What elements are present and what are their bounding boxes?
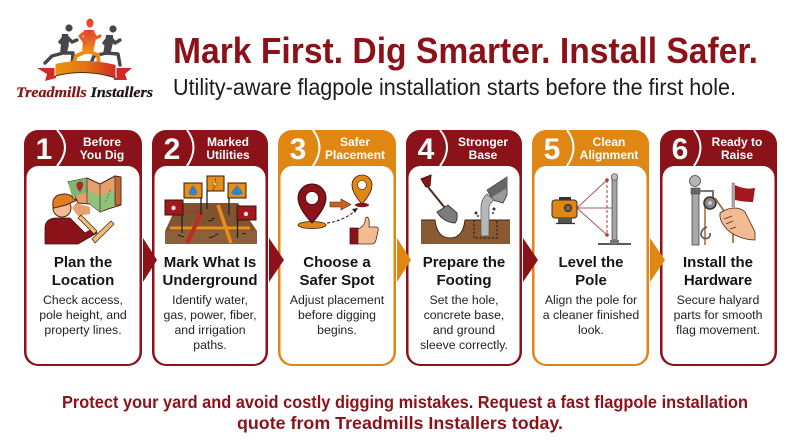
- header label: Raise: [721, 148, 753, 162]
- step description: Secure halyard: [677, 293, 760, 307]
- panel: step 2: [152, 130, 268, 366]
- arrow: step 2 to 3: [269, 238, 284, 282]
- icon: laser level and pole: [552, 174, 631, 244]
- step description: property lines.: [44, 323, 122, 337]
- ribbon banner: [37, 61, 132, 81]
- header label: Safer: [340, 135, 370, 149]
- header label: Placement: [325, 148, 385, 162]
- step description: flag movement.: [676, 323, 760, 337]
- step description: sleeve correctly.: [420, 338, 508, 352]
- card header: [152, 130, 268, 366]
- card header: [660, 130, 777, 366]
- step description: and irrigation: [174, 323, 246, 337]
- step title: Mark What Is: [164, 254, 256, 271]
- step title: Choose a: [303, 254, 371, 271]
- arrow: step 5 to 6: [650, 238, 665, 282]
- call to action: Protect your yard and avoid costly digging mistakes. Request a fast flagpole installation: [62, 392, 748, 412]
- step description: paths.: [193, 338, 227, 352]
- step description: a cleaner finished: [543, 308, 639, 322]
- card header: [278, 130, 396, 366]
- arrow: step 1 to 2: [143, 238, 157, 282]
- call to action: quote from Treadmills Installers today.: [237, 413, 563, 433]
- step title: Footing: [437, 272, 491, 289]
- subtitle: Utility-aware flagpole installation starts before the first hole.: [173, 74, 736, 100]
- card header: [532, 130, 649, 366]
- brand name: Treadmills Installers: [16, 85, 153, 101]
- header label: Before: [83, 135, 121, 149]
- step description: Align the pole for: [545, 293, 637, 307]
- step number: 3: [290, 133, 306, 166]
- arrow: step 3 to 4: [397, 238, 411, 282]
- step description: Identify water,: [172, 293, 248, 307]
- step title: Safer Spot: [299, 272, 375, 289]
- step number: 1: [36, 133, 52, 166]
- step number: 5: [544, 133, 560, 166]
- icon: center runner: [73, 18, 103, 67]
- panel: step 3: [278, 130, 396, 366]
- header label: Clean: [593, 135, 625, 149]
- step description: Adjust placement: [290, 293, 385, 307]
- step description: and ground: [433, 323, 495, 337]
- arrow: step 4 to 5: [523, 238, 538, 282]
- step description: parts for smooth: [674, 308, 763, 322]
- icon: hand pulling halyard: [690, 176, 755, 245]
- step number: 6: [672, 133, 688, 166]
- step title: Level the: [558, 254, 624, 271]
- step description: before digging: [298, 308, 376, 322]
- step description: concrete base,: [424, 308, 504, 322]
- step description: gas, power, fiber,: [164, 308, 256, 322]
- header label: Base: [469, 148, 498, 162]
- header label: Alignment: [580, 148, 638, 162]
- step title: Prepare the: [423, 254, 505, 271]
- step number: 2: [164, 133, 180, 166]
- step description: pole height, and: [39, 308, 127, 322]
- panel: step 1: [24, 130, 142, 366]
- call to action: [62, 392, 748, 433]
- panel: step 4: [406, 130, 522, 366]
- icon: left runner: [45, 24, 77, 65]
- icon: right runner: [91, 25, 120, 65]
- step description: Check access,: [43, 293, 123, 307]
- header label: Stronger: [458, 135, 508, 149]
- step description: Set the hole,: [429, 293, 499, 307]
- step title: Underground: [162, 272, 258, 289]
- logo: Treadmills Installers: [16, 18, 153, 101]
- step description: look.: [578, 323, 604, 337]
- step description: begins.: [317, 323, 357, 337]
- header label: Marked: [207, 135, 249, 149]
- step title: Pole: [575, 272, 607, 289]
- icon: safer location pins: [298, 175, 378, 244]
- icon: marked utility ground: [165, 176, 257, 244]
- panel: step 6: [660, 130, 777, 366]
- step title: Plan the: [54, 254, 112, 271]
- title: Mark First. Dig Smarter. Install Safer.: [173, 30, 758, 71]
- icon: shovel and concrete footing: [421, 175, 510, 244]
- panel: step 5: [532, 130, 649, 366]
- step number: 4: [418, 133, 435, 166]
- header label: Ready to: [712, 135, 762, 149]
- header label: Utilities: [206, 148, 250, 162]
- header label: You Dig: [80, 148, 124, 162]
- icon: person reading map: [45, 176, 121, 244]
- card header: [406, 130, 522, 366]
- step title: Hardware: [684, 272, 752, 289]
- card header: [24, 130, 142, 366]
- step title: Location: [52, 272, 114, 289]
- step title: Install the: [683, 254, 753, 271]
